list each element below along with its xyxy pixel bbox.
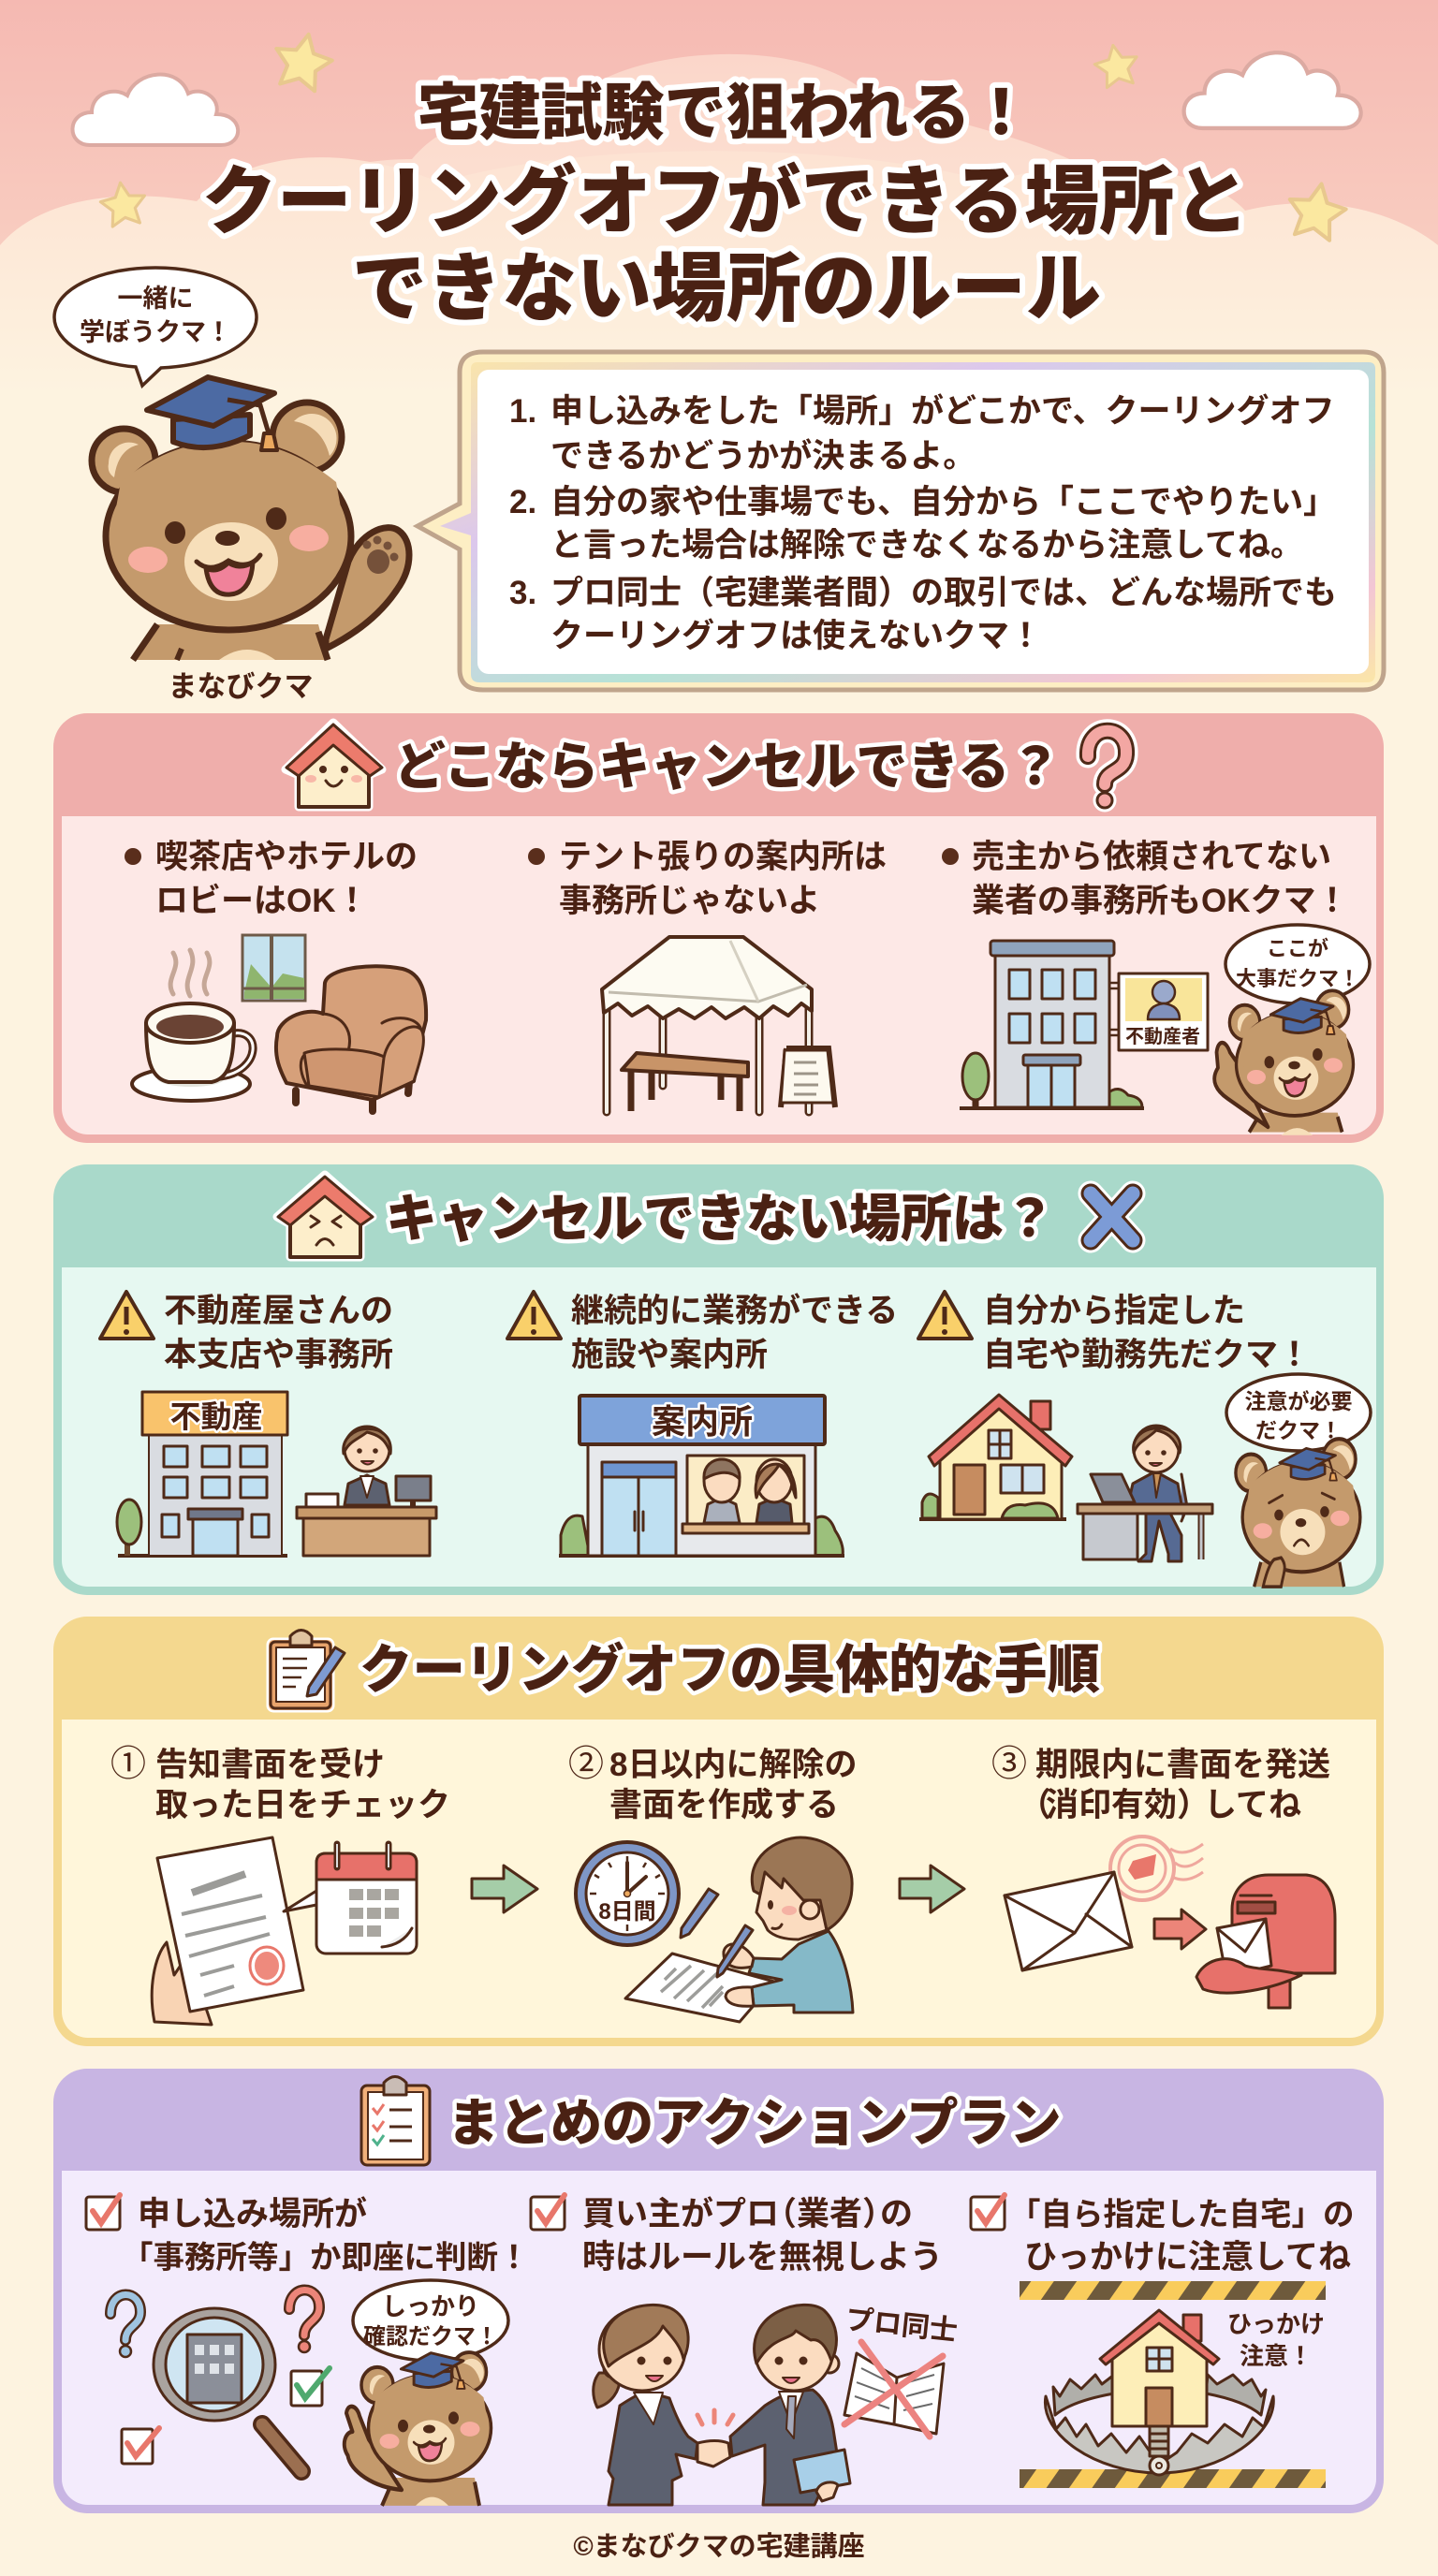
speech bubble: important: ここが bbox=[1267, 937, 1328, 960]
panel: procedure bbox=[53, 1617, 1384, 2046]
speech bubble: bear greeting bbox=[54, 268, 257, 386]
item: agent offices: 本支店や事務所 bbox=[164, 1337, 393, 1373]
step 1 text bbox=[110, 1745, 450, 1823]
step 1 text: ① bbox=[110, 1745, 146, 1784]
mascot: worried bear bbox=[1236, 1439, 1360, 1587]
speech bubble: important: 大事だクマ！ bbox=[1236, 967, 1359, 990]
item: unrequested agent: 売主から依頼されてない bbox=[972, 839, 1331, 875]
illustration: information center bbox=[559, 1396, 844, 1556]
step 2 text: 8日以内に解除の bbox=[609, 1747, 857, 1783]
title: クーリングオフができる場所と bbox=[202, 160, 1249, 243]
item: self-designated: 自宅や勤務先だクマ！ bbox=[983, 1337, 1311, 1373]
intro list: 申し込みをした「場所」がどこかで、クーリングオフ bbox=[550, 393, 1335, 430]
speech bubble: caution bbox=[1226, 1374, 1371, 1451]
icon: cross mark bbox=[1091, 1193, 1133, 1240]
illustration: information center: 案内所 bbox=[652, 1402, 753, 1441]
step 2 text: ② bbox=[568, 1745, 604, 1784]
heading: クーリングオフの具体的な手順 bbox=[360, 1640, 1100, 1699]
speech bubble: check bbox=[353, 2280, 508, 2361]
mascot: bear thumbs up bbox=[345, 2352, 491, 2506]
illustration: tent with table and signboard bbox=[602, 937, 835, 1112]
item: unrequested agent bbox=[942, 839, 1349, 919]
icon: checklist bbox=[361, 2076, 430, 2165]
item: cafe: 喫茶店やホテルの bbox=[155, 839, 418, 875]
item: tent: 事務所じゃないよ bbox=[559, 883, 820, 919]
action 1 text bbox=[86, 2195, 530, 2276]
illustration: real estate office and clerk: 不動産 bbox=[170, 1399, 262, 1434]
action 2 text bbox=[531, 2195, 943, 2276]
illustration: trap under house bbox=[1020, 2281, 1326, 2488]
illustration: house and remote worker bbox=[919, 1395, 1212, 1561]
item: continuous facilities: 継続的に業務ができる bbox=[571, 1293, 898, 1329]
step 3 text: ③ bbox=[991, 1745, 1027, 1784]
action 1 text: 申し込み場所が bbox=[138, 2196, 367, 2232]
panel: action plan bbox=[53, 2069, 1384, 2513]
illustration: magnifying glass and checks bbox=[110, 2290, 330, 2471]
intro list: と言った場合は解除できなくなるから注意してね。 bbox=[550, 527, 1303, 564]
intro list: 自分の家や仕事場でも、自分から「ここでやりたい」 bbox=[550, 484, 1336, 520]
title: 宅建試験で狙われる！ bbox=[418, 78, 1032, 147]
speech bubble: bear greeting: 一緒に bbox=[118, 285, 193, 313]
speech bubble: caution: だクマ！ bbox=[1255, 1418, 1342, 1442]
intro list: プロ同士（宅建業者間）の取引では、どんな場所でも bbox=[550, 575, 1337, 611]
panel: cancellable places bbox=[53, 713, 1384, 1143]
illustration: eight day clock bbox=[576, 1842, 718, 1945]
item: continuous facilities: 施設や案内所 bbox=[571, 1337, 768, 1373]
action 3 text: ひっかけに注意してね bbox=[1024, 2239, 1351, 2276]
speech bubble: bear greeting: 学ぼうクマ！ bbox=[80, 318, 231, 346]
step 1 text: 取った日をチェック bbox=[155, 1787, 450, 1823]
item: continuous facilities bbox=[507, 1292, 898, 1373]
intro list: クーリングオフは使えないクマ！ bbox=[550, 618, 1042, 654]
intro list: 3. bbox=[509, 575, 536, 611]
copyright: ©まなびクマの宅建講座 bbox=[573, 2531, 865, 2562]
icon: question mark bbox=[1088, 731, 1126, 809]
illustration: book crossed out bbox=[844, 2305, 959, 2437]
intro list: 2. bbox=[509, 484, 536, 520]
illustration: eight day clock: 8日間 bbox=[598, 1899, 656, 1925]
mascot: bear pointing bbox=[1214, 990, 1353, 1135]
item: agent offices: 不動産屋さんの bbox=[164, 1293, 393, 1329]
title bbox=[202, 78, 1249, 330]
illustration: business handshake bbox=[594, 2305, 850, 2505]
action 1 text: 「事務所等」か即座に判断！ bbox=[122, 2241, 530, 2276]
illustration: agent office building: 不動産者 bbox=[1125, 1026, 1200, 1047]
panel: non-cancellable places bbox=[53, 1164, 1384, 1595]
title: できない場所のルール bbox=[352, 247, 1101, 330]
icon: smiling house bbox=[286, 723, 382, 807]
illustration: book crossed out: プロ同士 bbox=[844, 2305, 959, 2347]
item: agent offices bbox=[100, 1292, 393, 1373]
illustration: trap under house: ひっかけ bbox=[1227, 2310, 1325, 2338]
illustration: trap under house: 注意！ bbox=[1240, 2342, 1313, 2370]
item: cafe: ロビーはOK！ bbox=[155, 883, 369, 919]
step 3 text bbox=[991, 1745, 1330, 1823]
action 3 text: 「自ら指定した自宅」の bbox=[1009, 2198, 1354, 2232]
intro list: できるかどうかが決まるよ。 bbox=[550, 438, 976, 475]
intro callout bbox=[418, 352, 1384, 690]
heading: どこならキャンセルできる？ bbox=[394, 738, 1061, 796]
illustration: agent office building bbox=[960, 941, 1208, 1108]
step 3 text: 期限内に書面を発送 bbox=[1035, 1747, 1330, 1783]
step 3 text: （消印有効）してね bbox=[1019, 1787, 1301, 1823]
icon: clipboard with pen bbox=[269, 1631, 345, 1710]
item: tent bbox=[528, 839, 887, 919]
action 2 text: 時はルールを無視しよう bbox=[582, 2239, 943, 2276]
intro list bbox=[509, 393, 1337, 654]
item: self-designated: 自分から指定した bbox=[983, 1293, 1245, 1329]
illustration: envelope and mailbox bbox=[1005, 1837, 1335, 2008]
item: self-designated bbox=[918, 1292, 1311, 1373]
arrow 2 bbox=[900, 1866, 964, 1912]
step 1 text: 告知書面を受け bbox=[155, 1747, 385, 1783]
speech bubble: check: 確認だクマ！ bbox=[363, 2324, 498, 2349]
decoration: clouds bbox=[72, 52, 1361, 145]
step 2 text bbox=[568, 1745, 857, 1823]
action 2 text: 買い主がプロ（業者）の bbox=[582, 2196, 913, 2232]
item: tent: テント張りの案内所は bbox=[559, 839, 887, 875]
illustration: person writing bbox=[625, 1837, 853, 2022]
item: unrequested agent: 業者の事務所もOKクマ！ bbox=[972, 883, 1349, 919]
decoration: stars bbox=[98, 28, 1349, 242]
action 3 text bbox=[971, 2195, 1354, 2276]
mascot name: まなびクマ bbox=[169, 670, 313, 703]
step 2 text: 書面を作成する bbox=[609, 1787, 839, 1823]
arrow 1 bbox=[472, 1866, 537, 1912]
mascot: bear waving bbox=[92, 377, 409, 660]
heading: キャンセルできない場所は？ bbox=[386, 1190, 1055, 1248]
heading: まとめのアクションプラン bbox=[448, 2094, 1062, 2152]
intro list: 1. bbox=[509, 393, 536, 430]
illustration: notice document and calendar bbox=[152, 1837, 417, 2025]
icon: upset house bbox=[277, 1175, 373, 1257]
illustration: real estate office and clerk bbox=[117, 1392, 436, 1556]
speech bubble: important bbox=[1225, 925, 1370, 1003]
illustration: coffee and armchair bbox=[132, 935, 426, 1111]
speech bubble: caution: 注意が必要 bbox=[1245, 1389, 1352, 1413]
speech bubble: check: しっかり bbox=[382, 2292, 479, 2320]
item: cafe bbox=[125, 839, 418, 919]
